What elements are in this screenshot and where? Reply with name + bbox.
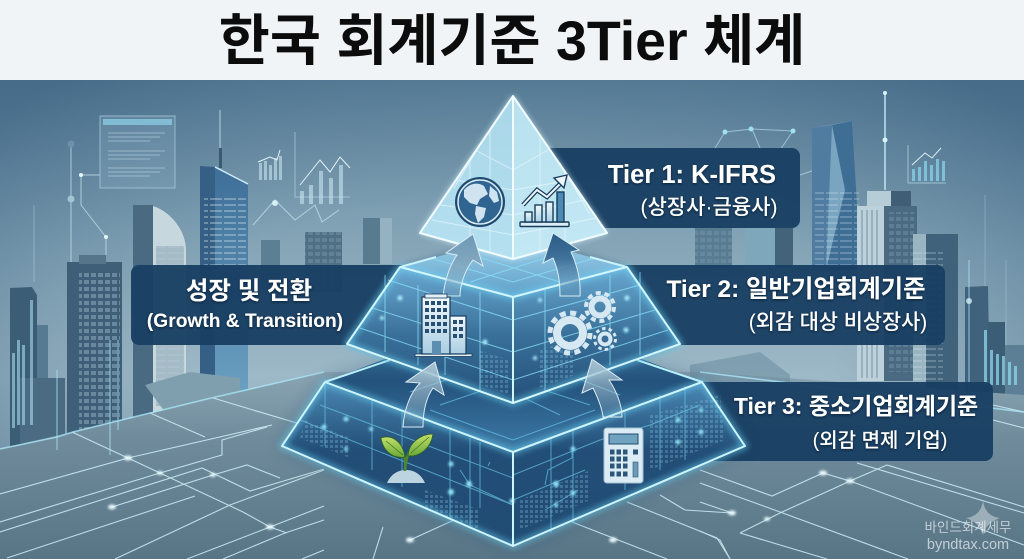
arrow: tier 2 to tier 1 left <box>443 234 483 296</box>
icon: globe <box>455 177 505 227</box>
tier 3 scope: (외감 면제 기업) <box>813 429 947 452</box>
arrow: tier 2 to tier 1 right <box>543 233 580 296</box>
title: 한국 회계기준 3Tier 체계 <box>219 10 805 72</box>
label: tier 2 <box>600 265 945 345</box>
floor with circuit lines <box>0 340 1024 559</box>
pyramid tier 2 <box>347 235 680 403</box>
tier 2 name: Tier 2: 일반기업회계기준 <box>666 276 926 303</box>
label: growth and transition <box>131 265 420 345</box>
side building far left <box>10 287 37 450</box>
label: tier 3 <box>670 382 993 461</box>
tier 1 scope: (상장사·금융사) <box>641 196 777 219</box>
watermark brand name: 바인드회계세무 <box>925 520 1011 535</box>
icon: office building <box>415 294 472 356</box>
background city left <box>10 110 392 450</box>
growth heading: 성장 및 전환 <box>186 277 312 305</box>
tier 3 name: Tier 3: 중소기업회계기준 <box>734 393 978 419</box>
growth subheading: (Growth & Transition) <box>147 311 343 332</box>
curved building <box>133 205 186 420</box>
watermark url: byndtax.com <box>927 537 1009 553</box>
arrow: tier 3 to tier 2 left <box>403 362 444 427</box>
blue tower <box>200 166 215 410</box>
title band <box>0 0 1024 80</box>
background city right <box>695 91 1024 400</box>
tier 1 name: Tier 1: K-IFRS <box>608 161 776 189</box>
watermark <box>925 501 1011 553</box>
far buildings <box>261 240 280 290</box>
near right towers <box>695 228 732 268</box>
icon: sprout <box>381 434 433 483</box>
icon: calculator <box>604 428 643 483</box>
tower left <box>67 262 122 437</box>
tier 2 scope: (외감 대상 비상장사) <box>749 311 927 334</box>
label: tier 1 <box>550 148 800 228</box>
icon: growth chart <box>520 175 569 226</box>
arrow: tier 3 to tier 2 right <box>582 359 622 417</box>
icon: gears <box>550 293 616 353</box>
pyramid tier 3 <box>282 310 745 546</box>
pyramid tier 1 <box>420 96 607 259</box>
watermark star <box>966 501 1000 535</box>
